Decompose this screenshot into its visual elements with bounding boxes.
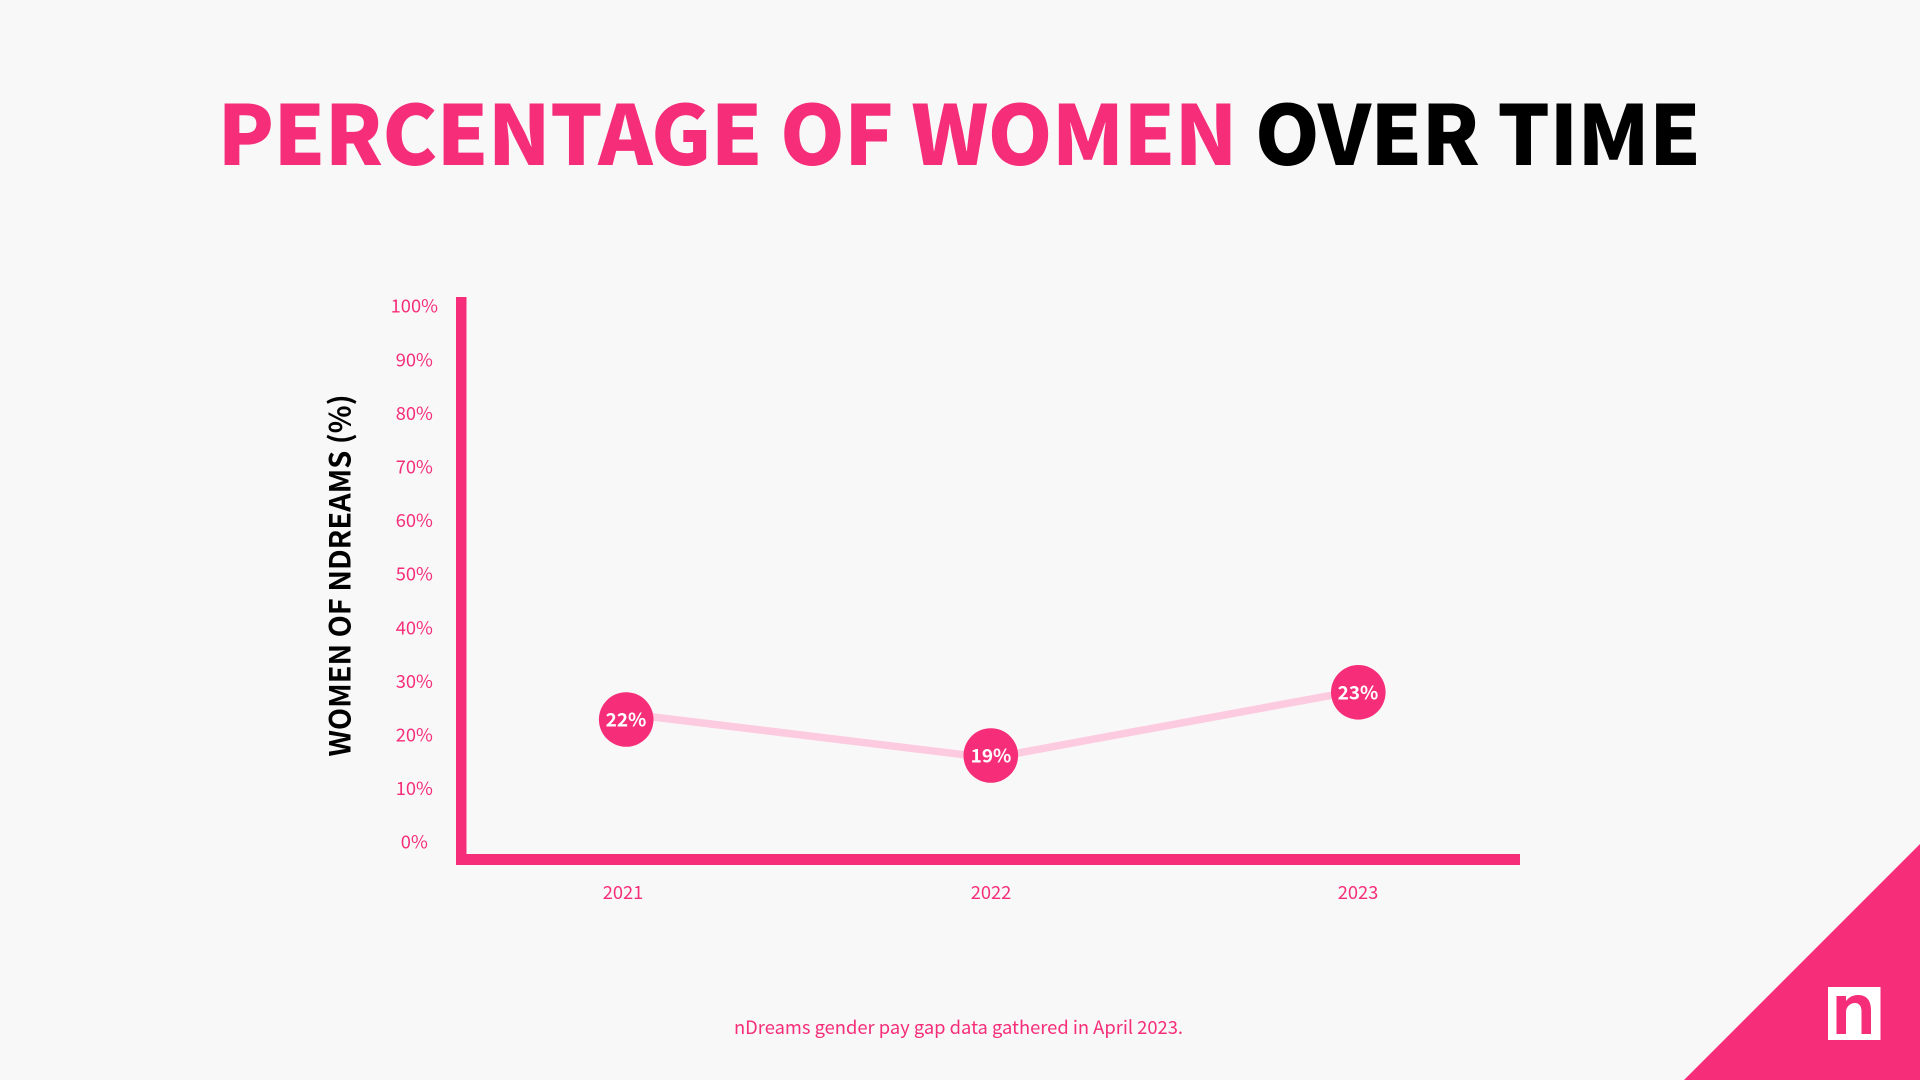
x-axis tick labels: 2022 [971, 879, 1011, 905]
data point: 2023 [1331, 665, 1386, 720]
y-axis tick labels: 60% [396, 507, 433, 533]
title: PERCENTAGE OF WOMEN OVER TIME [218, 69, 1701, 189]
y-axis tick labels: 10% [396, 775, 433, 801]
y-axis tick labels: 0% [401, 829, 428, 855]
x-axis tick labels [603, 879, 1378, 905]
y-axis tick labels: 50% [396, 560, 433, 586]
y-axis tick labels: 20% [396, 722, 433, 748]
y-axis tick labels [391, 293, 438, 855]
data point: 2021: 22% [606, 706, 646, 732]
y-axis title: WOMEN OF NDREAMS (%) [318, 394, 360, 757]
y-axis tick labels: 30% [396, 668, 433, 694]
chart axes [456, 297, 1520, 865]
data point: 2022: 19% [971, 742, 1011, 768]
footnote: nDreams gender pay gap data gathered in April 2023. [734, 1014, 1183, 1040]
y-axis tick labels: 70% [396, 454, 433, 480]
y-axis tick labels: 40% [396, 614, 433, 640]
y-axis tick labels: 90% [396, 346, 433, 372]
y-axis tick labels: 100% [391, 293, 438, 319]
data point: 2023: 23% [1338, 678, 1378, 705]
corner triangle [1684, 844, 1920, 1080]
y-axis tick labels: 80% [396, 400, 433, 426]
data point: 2022 [964, 728, 1018, 783]
data point: 2021 [599, 692, 654, 747]
data line [626, 690, 1358, 758]
x-axis tick labels: 2023 [1338, 879, 1378, 905]
x-axis tick labels: 2021 [603, 879, 643, 905]
icon: nDreams logo [1828, 987, 1880, 1040]
